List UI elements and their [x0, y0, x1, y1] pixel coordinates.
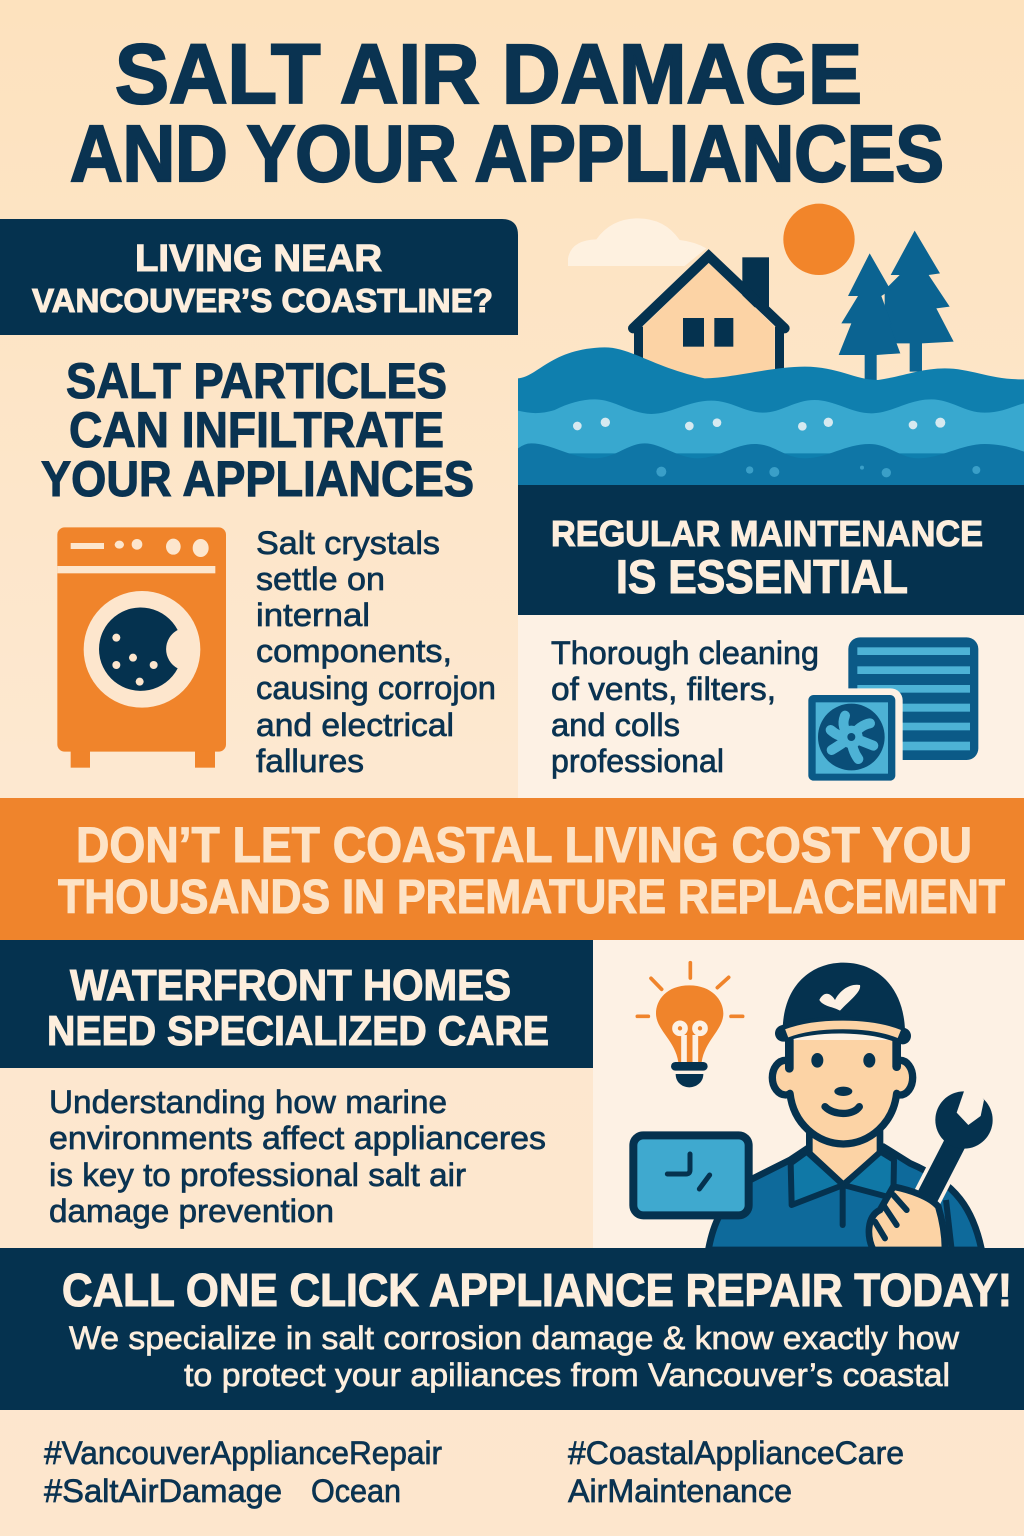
title: [70, 27, 944, 198]
icon: washing machine: [57, 527, 226, 768]
icon: vent and fan filter: [803, 637, 978, 786]
panel: waterfront homes banner: NEED SPECIALIZED CARE: [47, 1007, 549, 1054]
text: salt crystals description: and electrical: [256, 707, 454, 743]
heading: salt particles: [41, 353, 474, 507]
panel: technician illustration: [593, 940, 1024, 1250]
panel: waterfront homes banner: [0, 940, 593, 1068]
panel: call to action: [0, 1248, 1024, 1410]
text: salt crystals description: components,: [256, 633, 452, 669]
text: cleaning description: [551, 635, 819, 779]
panel: call to action: to protect your apiliances from Vancouver’s coastal: [184, 1357, 950, 1393]
text: salt crystals description: Salt crystals: [256, 525, 440, 561]
icon: wrench: [927, 1083, 993, 1198]
house: [633, 256, 785, 380]
text: marine environments description: Understanding how marine: [49, 1084, 447, 1120]
heading: salt particles: SALT PARTICLES: [66, 353, 447, 409]
technician figure: [708, 963, 993, 1250]
panel: regular maintenance banner: IS ESSENTIAL: [616, 550, 908, 603]
panel: waterfront homes banner: WATERFRONT HOMES: [70, 961, 511, 1010]
hashtags: #SaltAirDamage: [44, 1473, 282, 1509]
illustration: coastal house scene: [518, 204, 1024, 485]
hashtags: AirMaintenance: [568, 1473, 792, 1509]
panel: living near coastline banner: LIVING NEAR: [135, 238, 382, 280]
text: cleaning description: Thorough cleaning: [551, 635, 819, 671]
banner: don't let coastal living cost you: DON’T LET COASTAL LIVING COST YOU: [76, 817, 972, 873]
text: marine environments description: environments affect applianceres: [49, 1120, 546, 1156]
panel: regular maintenance banner: REGULAR MAINTENANCE: [551, 513, 983, 554]
title: SALT AIR DAMAGE: [115, 27, 862, 121]
text: cleaning description: and colls: [551, 707, 680, 743]
text: salt crystals description: fallures: [256, 743, 364, 779]
sun: [783, 204, 855, 275]
text: salt crystals description: causing corrojon: [256, 670, 496, 706]
title: AND YOUR APPLIANCES: [70, 109, 944, 198]
text: salt crystals description: [256, 525, 496, 779]
waves: [518, 347, 1024, 485]
banner: don't let coastal living cost you: [0, 798, 1024, 940]
panel: living near coastline banner: VANCOUVER’S COASTLINE?: [32, 282, 493, 319]
heading: salt particles: CAN INFILTRATE: [69, 402, 444, 458]
panel: cleaning tips: [518, 615, 1024, 798]
text: marine environments description: is key to professional salt air: [49, 1157, 466, 1193]
panel: call to action: We specialize in salt corrosion damage & know exactly how: [69, 1320, 960, 1356]
hashtags: #CoastalApplianceCare: [568, 1435, 904, 1471]
trees: [839, 231, 954, 382]
hashtags: Ocean: [311, 1473, 401, 1509]
text: marine environments description: damage prevention: [49, 1193, 334, 1229]
hashtags: [44, 1435, 904, 1509]
cloud: [568, 218, 706, 266]
text: cleaning description: professional: [551, 743, 724, 779]
panel: living near coastline banner: [0, 219, 518, 335]
text: salt crystals description: settle on: [256, 561, 385, 597]
hashtags: #VancouverApplianceRepair: [44, 1435, 442, 1471]
icon: light bulb: [637, 963, 743, 1087]
text: marine environments description: [49, 1084, 546, 1229]
panel: regular maintenance banner: [518, 485, 1024, 615]
text: cleaning description: of vents, filters,: [551, 671, 776, 707]
heading: salt particles: YOUR APPLIANCES: [41, 451, 474, 507]
icon: tablet: [633, 1135, 749, 1215]
text: salt crystals description: internal: [256, 597, 370, 633]
